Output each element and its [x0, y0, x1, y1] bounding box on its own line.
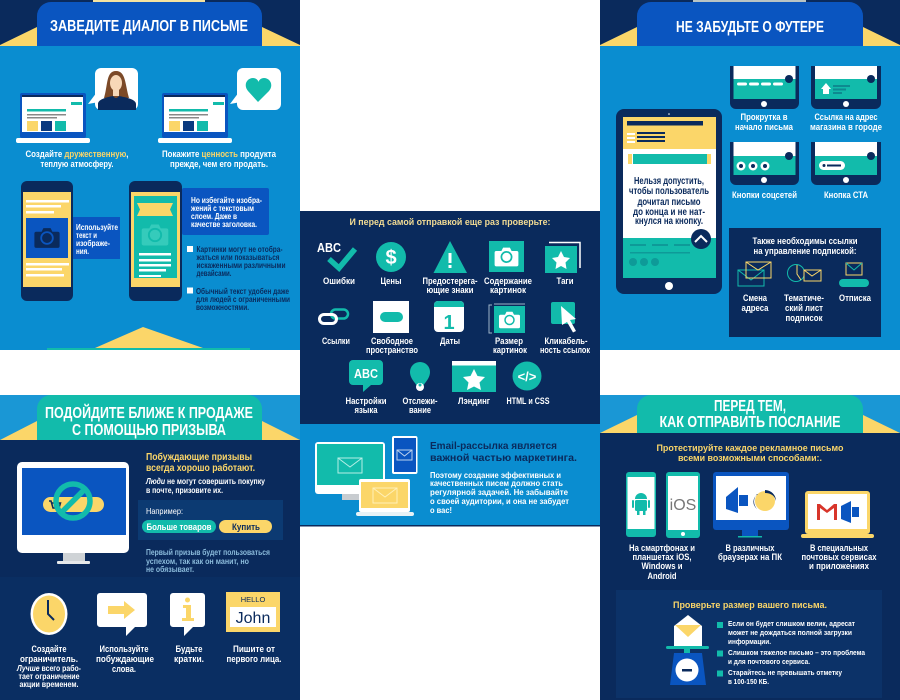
box: subscription management links: Смена	[743, 293, 768, 303]
panel: before sending	[600, 395, 900, 700]
icon: topic subscription list	[788, 264, 821, 282]
heading: before sending: ПЕРЕД ТЕМ,	[714, 398, 786, 415]
note: plain text accessibility: возможностями.	[196, 303, 249, 312]
icon: name tag: John	[236, 610, 270, 627]
label: smartphones and tablets	[629, 543, 695, 581]
text: first call note: успехом, так как он манит, но	[146, 556, 249, 566]
text: test every email	[656, 443, 844, 464]
heading: before sending: КАК ОТПРАВИТЬ ПОСЛАНИЕ	[660, 414, 840, 431]
icon: image size	[489, 304, 527, 355]
callout: avoid images with text: качестве заголовка.	[191, 220, 257, 229]
heading: checklist title: И перед самой отправкой еще раз проверьте:	[350, 217, 550, 228]
text: email marketing heading: Email-рассылка является	[430, 440, 557, 452]
text: tablet warning	[629, 176, 709, 227]
icon: iOS tablet: iOS	[670, 497, 696, 514]
icon: links: Ссылки	[322, 336, 350, 346]
text: test every email: всеми возможными способами:.	[678, 453, 822, 464]
icon: android smartphone	[626, 472, 656, 537]
heading: approach the sale: ПОДОЙДИТЕ БЛИЖЕ К ПРОДАЖЕ	[45, 404, 253, 422]
button: more products: Больше товаров	[146, 522, 212, 532]
label: desktop browsers: В различных	[726, 543, 774, 553]
icon: iOS tablet	[666, 472, 700, 538]
icon: info speech bubble	[170, 593, 205, 636]
text: email marketing body: о вас!	[430, 505, 452, 515]
text: email marketing body: качественных писем должно стать	[430, 478, 563, 488]
icon: clickable links: Кликабель-	[544, 336, 588, 346]
note: plain text accessibility: Обычный текст удобен даже	[196, 287, 289, 296]
icon: image content: картинок	[490, 285, 526, 295]
icon: tracking pin: Отслежи-	[402, 396, 438, 406]
icon: ABC errors: ABC	[317, 240, 342, 255]
label: CTA button: Кнопка СТА	[824, 190, 868, 200]
label: desktop browsers	[718, 543, 782, 562]
label: store link	[810, 112, 882, 132]
icon: laptop with email	[356, 479, 414, 516]
text: first call note	[146, 547, 270, 574]
box: check email size	[616, 590, 882, 698]
heading: don't forget footer: НЕ ЗАБУДЬТЕ О ФУТЕРЕ	[676, 19, 824, 36]
text: people cannot buy in email: Люди не могут совершить покупку	[145, 476, 265, 486]
note: plain text accessibility: для людей с ограниченными	[196, 295, 290, 304]
icon: links	[320, 310, 350, 346]
icon: envelope on scale	[666, 615, 709, 685]
icon: clickable links: ность ссылок	[540, 345, 590, 355]
icon: laptop with email	[158, 93, 232, 143]
text: email marketing body: о своей аудитории, и она не забудет	[430, 496, 569, 506]
icon: name tag	[226, 592, 280, 632]
label: mail services: и приложениях	[809, 561, 869, 571]
icon: tags	[545, 242, 580, 286]
icon: calendar dates	[434, 301, 464, 346]
list: size tips: и для почтового сервиса.	[728, 657, 810, 666]
text: first call note: не обязывает.	[146, 564, 194, 574]
text: first call note: Первый призыв будет пользоваться	[146, 547, 270, 557]
text: calls to action work: Побуждающие призывы	[146, 451, 252, 463]
icon: prices	[376, 242, 406, 286]
icon: html and css: </>	[518, 369, 537, 384]
icon: laptop with mail apps	[801, 491, 874, 538]
icon: tracking pin: вание	[409, 405, 431, 415]
text: be brief	[174, 644, 204, 664]
text: tablet warning: Нельзя допустить,	[634, 176, 704, 187]
icon: calendar dates: Даты	[440, 336, 460, 346]
text: calls to action work	[146, 451, 255, 474]
callout: use text and images: текст и	[76, 231, 97, 240]
icon: image size: Размер	[495, 336, 523, 346]
panel: final checklist	[300, 211, 600, 526]
panel: start a dialogue in the email	[0, 0, 300, 350]
label: smartphones and tablets: планшетах iOS,	[632, 552, 692, 562]
icon: language settings: Настройки	[346, 396, 386, 406]
box: subscription management links: подписок	[786, 313, 823, 323]
icon: CTA button	[811, 142, 881, 185]
text: be brief: Будьте	[176, 644, 202, 654]
icon: clickable links	[540, 302, 590, 355]
icon: tracking pin	[402, 362, 438, 415]
text: tablet warning: кнулся на кнопку.	[635, 216, 703, 227]
text: write in first person: первого лица.	[226, 654, 282, 664]
button: buy: Купить	[232, 522, 260, 532]
callout: use text and images: ния.	[76, 247, 89, 256]
callout: avoid images with text: слоем. Даже в	[191, 212, 237, 221]
callout: avoid images with text	[182, 188, 269, 235]
text: email marketing heading: важной частью маркетинга.	[430, 452, 577, 464]
icon: clock	[30, 593, 68, 635]
box: subscription management links	[729, 228, 881, 337]
text: value: Покажите ценность продукта	[162, 149, 277, 160]
text: people cannot buy in email: в почте, призовите их.	[146, 485, 223, 495]
text: calls to action work: всегда хорошо работают.	[146, 462, 255, 474]
list: size tips: Если он будет слишком велик, адресат	[728, 619, 855, 628]
label: scroll to top	[735, 112, 794, 132]
icon: laptop with email	[16, 93, 90, 143]
text: be brief: кратки.	[174, 654, 204, 664]
icon: ABC errors	[317, 240, 355, 286]
icon: free space: Свободное	[371, 336, 413, 346]
text: value line 2: прежде, чем его продать.	[170, 159, 268, 170]
button: more products	[142, 520, 216, 533]
heading: before sending	[660, 398, 840, 431]
icon: speech bubble with heart	[230, 68, 281, 110]
box: subscription management links: Тематиче-	[784, 293, 824, 303]
text: create a limiter: Лучше всего рабо-	[16, 664, 81, 673]
label: smartphones and tablets: Windows и	[642, 561, 682, 571]
box: example buttons: Например:	[146, 506, 183, 516]
icon: free space	[366, 301, 418, 355]
text: email marketing body	[430, 470, 569, 515]
panel: footer	[600, 0, 900, 350]
text: email marketing body: регулярной задачей. Не забывайте	[430, 487, 568, 497]
text: friendly line 2: теплую атмосферу.	[40, 159, 114, 170]
text: tablet warning: чтобы пользователь	[629, 185, 709, 197]
text: create a limiter	[16, 644, 81, 689]
text: create a limiter: акции временем.	[20, 680, 78, 689]
box: subscription management links: Также необходимы ссылки	[752, 236, 858, 246]
box: subscription management links: ский лист	[785, 303, 824, 313]
icon: tablet with email	[392, 436, 418, 474]
icon: language settings	[346, 360, 386, 415]
icon: image content	[484, 241, 532, 295]
text: use motivating words: слова.	[112, 664, 136, 674]
icon: image size: картинок	[493, 345, 527, 355]
icon: social buttons	[730, 142, 799, 185]
icon: warning signs: ющие знаки	[426, 285, 474, 295]
text: use motivating words: побуждающие	[96, 654, 154, 664]
note: images may be distorted: девайсами.	[196, 269, 232, 278]
icon: desktop browsers	[713, 472, 789, 538]
icon: language settings: языка	[354, 405, 378, 415]
icon: store address link	[811, 66, 881, 109]
icon: calendar dates: 1	[443, 312, 455, 334]
note: plain text accessibility	[187, 287, 290, 312]
label: desktop browsers: браузерах на ПК	[718, 552, 782, 562]
text: create a limiter: ограничитель.	[20, 654, 78, 664]
icon: prices: Цены	[380, 276, 402, 286]
icon: image content: Содержание	[484, 276, 532, 286]
text: people cannot buy in email	[145, 476, 265, 495]
icon: monitor with email	[315, 442, 385, 500]
icon: html and css	[506, 362, 550, 406]
list: size tips: информации.	[728, 637, 771, 646]
label: mail services: почтовых сервисах	[802, 552, 876, 562]
label: store link: Ссылка на адрес	[814, 112, 878, 122]
icon: monitor with crossed-out buy button	[17, 462, 129, 564]
note: images may be distorted	[187, 245, 286, 278]
label: smartphones and tablets: На смартфонах и	[629, 543, 695, 553]
note: images may be distorted: жаться или показываться	[196, 253, 280, 262]
list: size tips: может не дождаться полной загрузки	[728, 628, 852, 637]
heading: approach the sale	[45, 404, 253, 439]
list: size tips: Старайтесь не превышать отметку	[728, 668, 843, 677]
text: email marketing heading	[430, 440, 577, 464]
text: tablet warning: дочитал письмо	[638, 197, 700, 208]
heading: check size: Проверьте размер вашего письма.	[673, 600, 827, 611]
note: images may be distorted: искаженными различными	[196, 261, 286, 270]
callout: use text and images: изображе-	[76, 239, 110, 248]
label: store link: магазина в городе	[810, 122, 882, 132]
phone: image with text overlay	[129, 181, 182, 301]
box: subscription management links: Отписка	[839, 293, 872, 303]
icon: unsubscribe	[839, 263, 869, 287]
list: size tips	[717, 619, 866, 686]
icon: arrow speech bubble	[97, 593, 147, 636]
icon: tags: Таги	[556, 276, 574, 286]
note: images may be distorted: Картинки могут не отобра-	[196, 245, 283, 254]
button: buy	[219, 520, 272, 533]
icon: warning signs: Предостерега-	[422, 276, 478, 286]
icon: prices: $	[385, 247, 397, 269]
icon: change address	[738, 262, 771, 286]
label: mail services	[802, 543, 876, 571]
callout: use text and images: Используйте	[76, 223, 118, 232]
icon: free space: пространство	[366, 345, 418, 355]
icon: warning signs	[422, 241, 478, 295]
box: subscription management links: на управление подпиской:	[754, 246, 856, 256]
panel: calls to action	[0, 395, 300, 700]
box: subscription management links: адреса	[742, 303, 769, 313]
text: friendly: Создайте дружественную,	[26, 149, 129, 160]
text: write in first person	[226, 644, 282, 664]
label: smartphones and tablets: Android	[648, 571, 676, 581]
heading: start a dialogue: ЗАВЕДИТЕ ДИАЛОГ В ПИСЬМЕ	[50, 18, 248, 35]
icon: language settings: ABC	[354, 367, 378, 381]
text: email marketing body: Поэтому создание эффективных и	[430, 470, 561, 480]
text: create a limiter: Создайте	[32, 644, 66, 654]
callout: avoid images with text: Но избегайте изобра-	[191, 196, 262, 205]
text: create a limiter: тает ограничение	[18, 672, 80, 681]
icon: html and css: HTML и CSS	[506, 396, 550, 406]
heading: approach the sale: С ПОМОЩЬЮ ПРИЗЫВА	[72, 422, 226, 439]
icon: name tag: HELLO	[241, 595, 265, 604]
text: use motivating words: Используйте	[100, 644, 148, 654]
text: tablet warning: до конца и не нат-	[633, 207, 705, 218]
label: social buttons: Кнопки соцсетей	[732, 190, 797, 200]
label: mail services: В специальных	[810, 543, 868, 553]
list: size tips: Слишком тяжелое письмо – это проблема	[728, 648, 866, 657]
list: size tips: в 100-150 КБ.	[728, 677, 769, 686]
icon: large tablet	[616, 109, 722, 294]
icon: scroll to top	[730, 66, 799, 109]
icon: landing page: Лэндинг	[458, 396, 490, 406]
box: example buttons	[138, 500, 283, 540]
icon: ABC errors: Ошибки	[323, 276, 355, 286]
callout: avoid images with text: жений с текстовым	[190, 204, 254, 213]
text: write in first person: Пишите от	[233, 644, 276, 654]
icon: landing page	[452, 361, 496, 406]
phone: text and image	[21, 181, 73, 301]
text: use motivating words	[96, 644, 154, 674]
label: scroll to top: Прокрутка в	[740, 112, 788, 122]
text: test every email: Протестируйте каждое рекламное письмо	[656, 443, 844, 454]
label: scroll to top: начало письма	[735, 122, 794, 132]
icon: speech bubble with woman	[88, 68, 138, 110]
callout: use text and images	[73, 217, 120, 259]
